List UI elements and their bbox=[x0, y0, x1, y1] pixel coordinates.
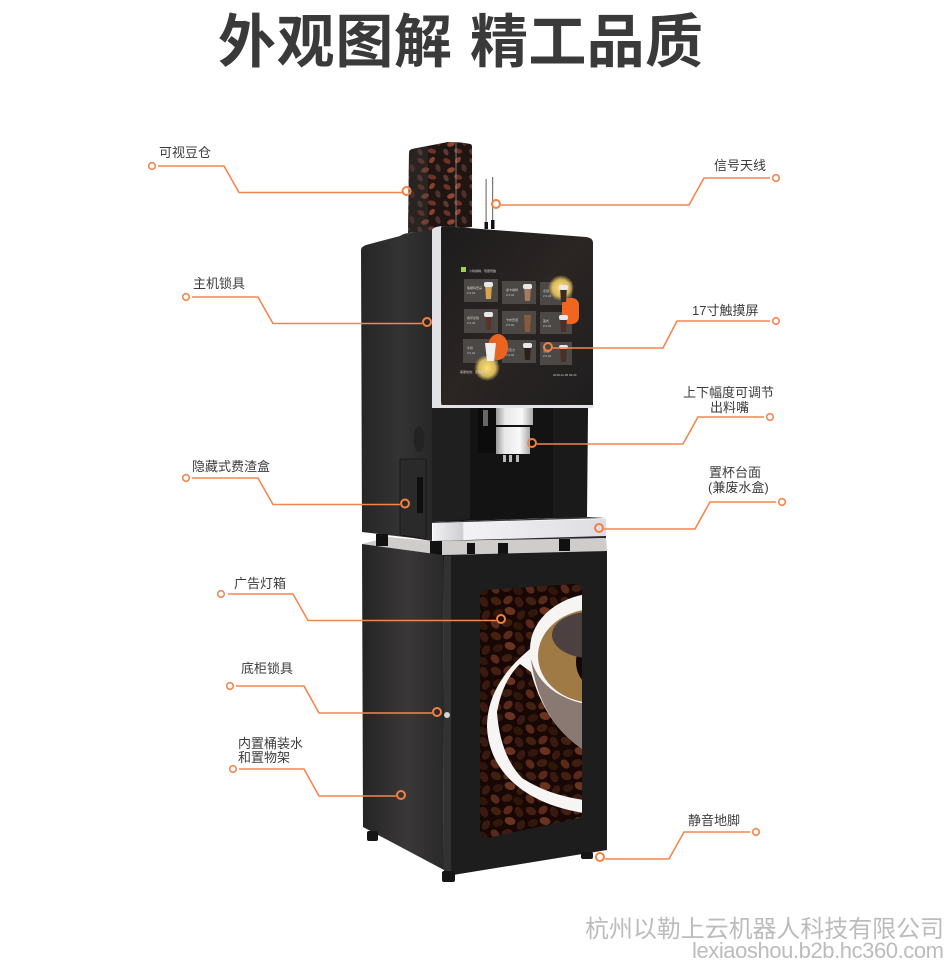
drink tile labels: ¥ 0.01 bbox=[467, 321, 476, 325]
screen header: 小勒咖啡，现磨现做 bbox=[469, 268, 496, 273]
drink tile labels bbox=[467, 285, 552, 358]
callout: 隐藏式费渣盒: 隐藏式费渣盒 bbox=[192, 459, 270, 474]
icon: foot right bbox=[581, 852, 593, 859]
drink tile labels: ¥ 0.01 bbox=[467, 291, 476, 295]
callout: 置杯台面（兼废水盒） bbox=[595, 465, 785, 532]
icon: signal antennas bbox=[484, 177, 494, 229]
callout: 上下幅度可调节出料嘴: 上下幅度可调节 bbox=[683, 385, 774, 400]
title bbox=[218, 10, 703, 75]
icon: main lock bbox=[432, 316, 438, 326]
saucer bbox=[487, 638, 584, 813]
icon: dispensing nozzle bbox=[478, 408, 533, 462]
icon: foot left bbox=[367, 831, 378, 841]
callout: 信号天线: 信号天线 bbox=[714, 158, 766, 173]
drink tile labels: ¥ 0.01 bbox=[543, 294, 552, 298]
drink tile labels: ¥ 0.01 bbox=[506, 353, 515, 357]
drink tile labels: 香草拿铁 bbox=[467, 315, 479, 320]
screen footer bbox=[460, 369, 577, 377]
title: 外观图解 bbox=[218, 10, 452, 75]
drink tile labels: 摩卡咖啡 bbox=[506, 287, 518, 292]
icon: cup tray bbox=[432, 517, 606, 544]
drink tile labels: 浓缩 bbox=[543, 348, 549, 353]
callout: 17寸触摸屏 bbox=[544, 303, 779, 351]
drink tile labels: ¥ 0.01 bbox=[467, 351, 476, 355]
callout: 底柜锁具 bbox=[227, 661, 441, 716]
drink tile labels: 牛奶 bbox=[467, 345, 473, 350]
drink tile labels: ¥ 0.01 bbox=[506, 323, 515, 327]
callout: 广告灯箱: 广告灯箱 bbox=[234, 576, 286, 591]
machine feet bbox=[376, 534, 570, 555]
callout: 隐藏式费渣盒 bbox=[183, 459, 409, 508]
drink cups bbox=[484, 282, 568, 362]
callout: 底柜锁具: 底柜锁具 bbox=[241, 661, 293, 676]
callout: 上下幅度可调节出料嘴 bbox=[528, 385, 774, 447]
icon: speaker grille bbox=[414, 426, 424, 452]
glow lights bbox=[474, 275, 579, 381]
callout: 内置桶装水和置物架 bbox=[230, 736, 405, 799]
callout: 上下幅度可调节出料嘴: 出料嘴 bbox=[710, 400, 749, 415]
panel: upper cabinet side bbox=[361, 230, 438, 541]
coffee machine bbox=[361, 142, 607, 882]
callout: 信号天线 bbox=[492, 158, 779, 208]
icon: bean hopper bbox=[408, 142, 472, 233]
icon: foot center bbox=[442, 871, 455, 882]
watermark: company name: 杭州以勒上云机器人科技有限公司 bbox=[585, 916, 944, 943]
callout: 内置桶装水和置物架: 内置桶装水 bbox=[238, 736, 303, 751]
callout: 广告灯箱 bbox=[218, 576, 505, 623]
coffee cup bbox=[530, 594, 582, 748]
screen header bbox=[461, 267, 496, 273]
callout: 主机锁具: 主机锁具 bbox=[193, 276, 245, 291]
callout: 17寸触摸屏: 17寸触摸屏 bbox=[692, 303, 758, 318]
grounds drawer bbox=[400, 459, 426, 539]
callout: 主机锁具 bbox=[183, 276, 431, 326]
panel: touch screen bbox=[432, 226, 593, 408]
screen footer: 2018-11-08 09:40 bbox=[553, 373, 577, 377]
drink tile labels: 美式 bbox=[543, 318, 549, 323]
callout: 置杯台面（兼废水盒）: (兼废水盒) bbox=[708, 480, 769, 495]
screen footer: 客服热线：定制服务 bbox=[460, 369, 487, 374]
drink tile labels: 焦糖玛奇朵 bbox=[467, 285, 482, 290]
panel: base cabinet bbox=[362, 544, 607, 882]
callout: 内置桶装水和置物架: 和置物架 bbox=[238, 750, 290, 765]
callout: 可视豆仓 bbox=[149, 145, 410, 195]
callout: 静音地脚: 静音地脚 bbox=[688, 813, 740, 828]
callout: 可视豆仓: 可视豆仓 bbox=[159, 145, 211, 160]
drink tile labels: 卡布奇诺 bbox=[506, 317, 518, 322]
drink tile labels: ¥ 0.01 bbox=[543, 354, 552, 358]
panel: brew section bbox=[432, 408, 588, 522]
title: 精工品质 bbox=[470, 10, 703, 75]
icon: base lock bbox=[444, 712, 450, 718]
beans on saucer bbox=[497, 664, 584, 800]
panel: base cabinet shelf bbox=[362, 537, 607, 555]
panel: advertising lightbox bbox=[480, 584, 582, 838]
drink tile labels: ¥ 0.01 bbox=[506, 293, 515, 297]
drink tiles bbox=[463, 279, 572, 365]
callout: 置杯台面（兼废水盒）: 置杯台面 bbox=[709, 465, 761, 480]
drink tile labels: 巧克力 bbox=[506, 347, 515, 352]
drink tile labels: ¥ 0.01 bbox=[543, 324, 552, 328]
callout: 静音地脚 bbox=[596, 813, 759, 861]
drink tile labels: 拿铁 bbox=[543, 288, 549, 293]
